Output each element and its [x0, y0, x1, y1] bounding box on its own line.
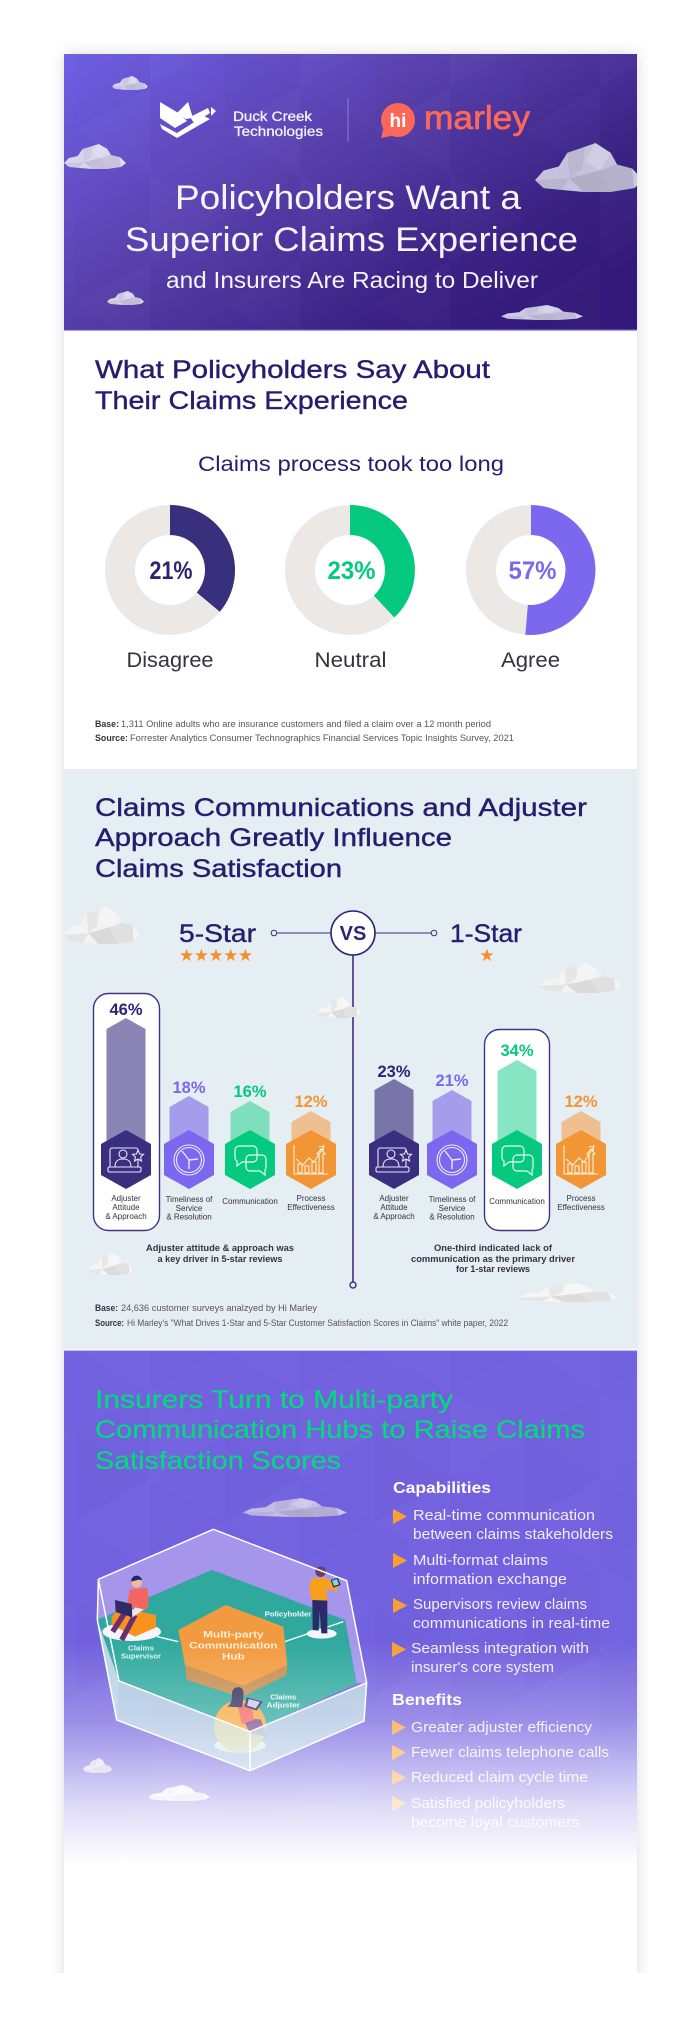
- bar: adjuster 46%: [101, 1001, 151, 1221]
- panel: header banner: [64, 54, 643, 330]
- donut: agree: 57%: [508, 557, 556, 585]
- person: claims adjuster: Claims: [270, 1692, 296, 1701]
- chart: 5-star drivers: [101, 1001, 336, 1222]
- hub block: [178, 1605, 287, 1697]
- bar: timeliness 18%: [164, 1079, 214, 1222]
- heading: Communication Hubs to Raise Claims: [95, 1416, 585, 1444]
- bar: adjuster 23%: 23%: [377, 1063, 411, 1081]
- panel: multi-party communication hubs: [64, 1349, 637, 1973]
- glass front walls: [97, 1620, 367, 1771]
- label: 1-star: ★: [479, 946, 495, 965]
- bar: process 12%: [556, 1093, 606, 1212]
- caption: 5-star: Adjuster attitude & approach was: [146, 1243, 294, 1254]
- logo divider: [348, 98, 349, 142]
- cloud: low left: [83, 1758, 112, 1773]
- title: [125, 179, 578, 293]
- list: capabilities: between claims stakeholders: [413, 1526, 613, 1543]
- bar: communication 16%: Communication: [222, 1197, 278, 1206]
- panel: 5-star vs 1-star: [64, 769, 637, 1350]
- list: capabilities: Supervisors review claims: [413, 1596, 587, 1613]
- list: capabilities: Capabilities: [393, 1480, 491, 1497]
- bar: adjuster 46%: Attitude: [112, 1203, 140, 1212]
- bar: process 12%: 12%: [564, 1093, 598, 1111]
- caption: 1-star: for 1-star reviews: [456, 1264, 530, 1275]
- list: capabilities: insurer's core system: [411, 1659, 554, 1676]
- bar: timeliness 21%: Service: [439, 1204, 466, 1213]
- cloud: low right: [518, 1283, 619, 1302]
- label: 5-star: ★★★★★: [179, 946, 253, 965]
- base and source note: [95, 719, 514, 743]
- logo: hi marley: hi: [390, 111, 406, 132]
- bar: timeliness 21%: 21%: [435, 1072, 469, 1090]
- chart: 1-star drivers: [369, 1042, 606, 1222]
- title: Superior Claims Experience: [125, 221, 578, 259]
- cloud: big right: [535, 143, 643, 192]
- heading: Satisfaction Scores: [95, 1447, 341, 1475]
- vs connector: [271, 911, 437, 1288]
- heading: [94, 798, 587, 878]
- base and source note: 1,311 Online adults who are insurance customers and filed a claim over a 12 month period: [121, 719, 491, 729]
- list: capabilities: information exchange: [413, 1571, 567, 1588]
- label: 5-star: 5-Star: [179, 920, 256, 948]
- bar: adjuster 46%: Adjuster: [111, 1194, 141, 1203]
- bar: adjuster 23%: Attitude: [380, 1203, 408, 1212]
- bar: adjuster 23%: [369, 1063, 419, 1221]
- bar: timeliness 21%: [427, 1072, 477, 1222]
- cloud: centre: [317, 997, 361, 1018]
- base and source note: Base:: [95, 719, 119, 729]
- list: capabilities: [392, 1480, 613, 1676]
- heading: Claims Satisfaction: [95, 855, 342, 883]
- list: capabilities: Seamless integration with: [411, 1640, 589, 1657]
- person: policyholder: Policyholder: [265, 1609, 311, 1618]
- donut: disagree: Disagree: [126, 649, 214, 672]
- floor connectors: [157, 1622, 343, 1642]
- bar: process 12%: 12%: [294, 1093, 328, 1111]
- person: claims adjuster: Adjuster: [267, 1700, 300, 1709]
- bottom white fade: [64, 1640, 637, 1864]
- cloud: lower right: [501, 305, 583, 320]
- list: benefits: Greater adjuster efficiency: [411, 1719, 593, 1736]
- caption: 1-star: [411, 1243, 575, 1275]
- bar: process 12%: [286, 1093, 336, 1212]
- person: claims supervisor: Claims: [128, 1644, 154, 1653]
- heading: Claims Communications and Adjuster: [95, 794, 587, 822]
- chart subtitle: Claims process took too long: [198, 453, 504, 476]
- cloud: lower left: [107, 291, 144, 305]
- heading: Insurers Turn to Multi-party: [95, 1386, 454, 1414]
- bar: adjuster 46%: 46%: [109, 1001, 143, 1019]
- donut: agree: Agree: [501, 649, 560, 672]
- cloud: upper: [243, 1498, 347, 1517]
- bar: timeliness 21%: & Resolution: [429, 1212, 475, 1222]
- cloud: right: [540, 963, 622, 993]
- bar: adjuster 46%: & Approach: [105, 1212, 147, 1221]
- list: benefits: Fewer claims telephone calls: [411, 1744, 609, 1761]
- logo: hi marley: marley: [424, 99, 531, 136]
- bar: communication 34%: [489, 1042, 545, 1206]
- base and source note: Source:: [95, 733, 128, 743]
- hub block: Communication: [189, 1640, 277, 1650]
- bar: communication 34%: 34%: [500, 1042, 534, 1060]
- person: claims supervisor: Supervisor: [121, 1652, 161, 1661]
- floor: [97, 1570, 357, 1732]
- heading: [95, 356, 490, 415]
- bar: timeliness 18%: Service: [176, 1204, 203, 1213]
- donut: disagree: 21%: [150, 557, 192, 585]
- highlight box: 1-star communication: [484, 1030, 550, 1230]
- panel: what policyholders say: [94, 360, 596, 743]
- heading: [95, 1386, 585, 1475]
- hub block: Hub: [222, 1651, 245, 1661]
- hub block: Multi-party: [203, 1629, 264, 1639]
- logo: Duck Creek Technologies: Duck Creek: [233, 109, 312, 124]
- bar: communication 16%: [222, 1083, 278, 1206]
- heading: Their Claims Experience: [95, 387, 408, 415]
- label: 5-star: [180, 924, 256, 962]
- list: capabilities: Multi-format claims: [413, 1552, 548, 1569]
- bar: timeliness 18%: & Resolution: [166, 1212, 212, 1222]
- heading: What Policyholders Say About: [95, 356, 490, 384]
- vs connector: VS: [340, 923, 366, 945]
- list: benefits: Reduced claim cycle time: [411, 1769, 588, 1786]
- logo: hi marley: [381, 103, 530, 138]
- list: benefits: Benefits: [392, 1692, 462, 1709]
- illustration: communication hub: [97, 1529, 367, 1771]
- title: Policyholders Want a: [175, 179, 521, 217]
- base and source note: Base:: [95, 1303, 118, 1313]
- bar: timeliness 18%: Timeliness of: [166, 1195, 213, 1204]
- label: 1-star: 1-Star: [450, 920, 522, 948]
- donut: neutral: [300, 505, 415, 672]
- heading: Approach Greatly Influence: [95, 824, 452, 852]
- bar: process 12%: Process: [297, 1194, 325, 1203]
- bar: timeliness 21%: Timeliness of: [429, 1195, 476, 1204]
- list: benefits: [392, 1692, 609, 1831]
- donut: neutral: 23%: [328, 557, 376, 585]
- title: and Insurers Are Racing to Deliver: [166, 267, 538, 293]
- glass outline: [97, 1529, 367, 1771]
- bar: process 12%: Effectiveness: [557, 1203, 605, 1212]
- cloud: left: [64, 144, 126, 169]
- logo: Duck Creek Technologies: Technologies: [234, 124, 323, 139]
- label: 1-star: [452, 924, 522, 961]
- person: claims adjuster: [214, 1687, 300, 1753]
- cloud: left: [64, 906, 140, 944]
- base and source note: Forrester Analytics Consumer Technographics Financial Services Topic Insights Survey, 2021: [130, 733, 514, 743]
- bar: process 12%: Process: [567, 1194, 595, 1203]
- list: capabilities: communications in real-time: [413, 1615, 610, 1632]
- base and source note: 24,636 customer surveys analzyed by Hi Marley: [121, 1303, 318, 1313]
- person: claims supervisor: [102, 1576, 161, 1661]
- caption: 5-star: [146, 1244, 294, 1264]
- bar: process 12%: Effectiveness: [287, 1203, 335, 1212]
- cloud: low middle: [148, 1785, 210, 1801]
- bar: adjuster 23%: & Approach: [373, 1212, 415, 1221]
- bar: adjuster 23%: Adjuster: [379, 1194, 409, 1203]
- person: policyholder: [265, 1566, 341, 1639]
- list: benefits: become loyal customers: [411, 1814, 579, 1831]
- bar: communication 34%: Communication: [489, 1197, 545, 1206]
- bar: communication 16%: 16%: [233, 1083, 267, 1101]
- caption: 1-star: communication as the primary driver: [411, 1254, 575, 1265]
- glass back walls: [97, 1529, 367, 1683]
- base and source note: Source:: [95, 1318, 124, 1328]
- cloud: low left: [88, 1253, 133, 1275]
- base and source note: Hi Marley's "What Drives 1-Star and 5-Star Customer Satisfaction Scores in Claims" white paper, 2022: [127, 1318, 508, 1328]
- donut: agree: [481, 505, 595, 672]
- caption: 5-star: a key driver in 5-star reviews: [158, 1254, 282, 1265]
- cloud: top left: [112, 76, 148, 90]
- list: capabilities: Real-time communication: [413, 1507, 595, 1524]
- caption: 1-star: One-third indicated lack of: [434, 1243, 553, 1254]
- donut: disagree: [120, 505, 235, 672]
- highlight box: 5-star adjuster: [94, 994, 160, 1230]
- logo: Duck Creek Technologies: [160, 102, 323, 139]
- bar: timeliness 18%: 18%: [172, 1079, 206, 1097]
- donut: neutral: Neutral: [314, 649, 386, 672]
- infographic: [64, 54, 637, 1851]
- list: benefits: Satisfied policyholders: [411, 1795, 565, 1812]
- base and source note: [95, 1303, 508, 1328]
